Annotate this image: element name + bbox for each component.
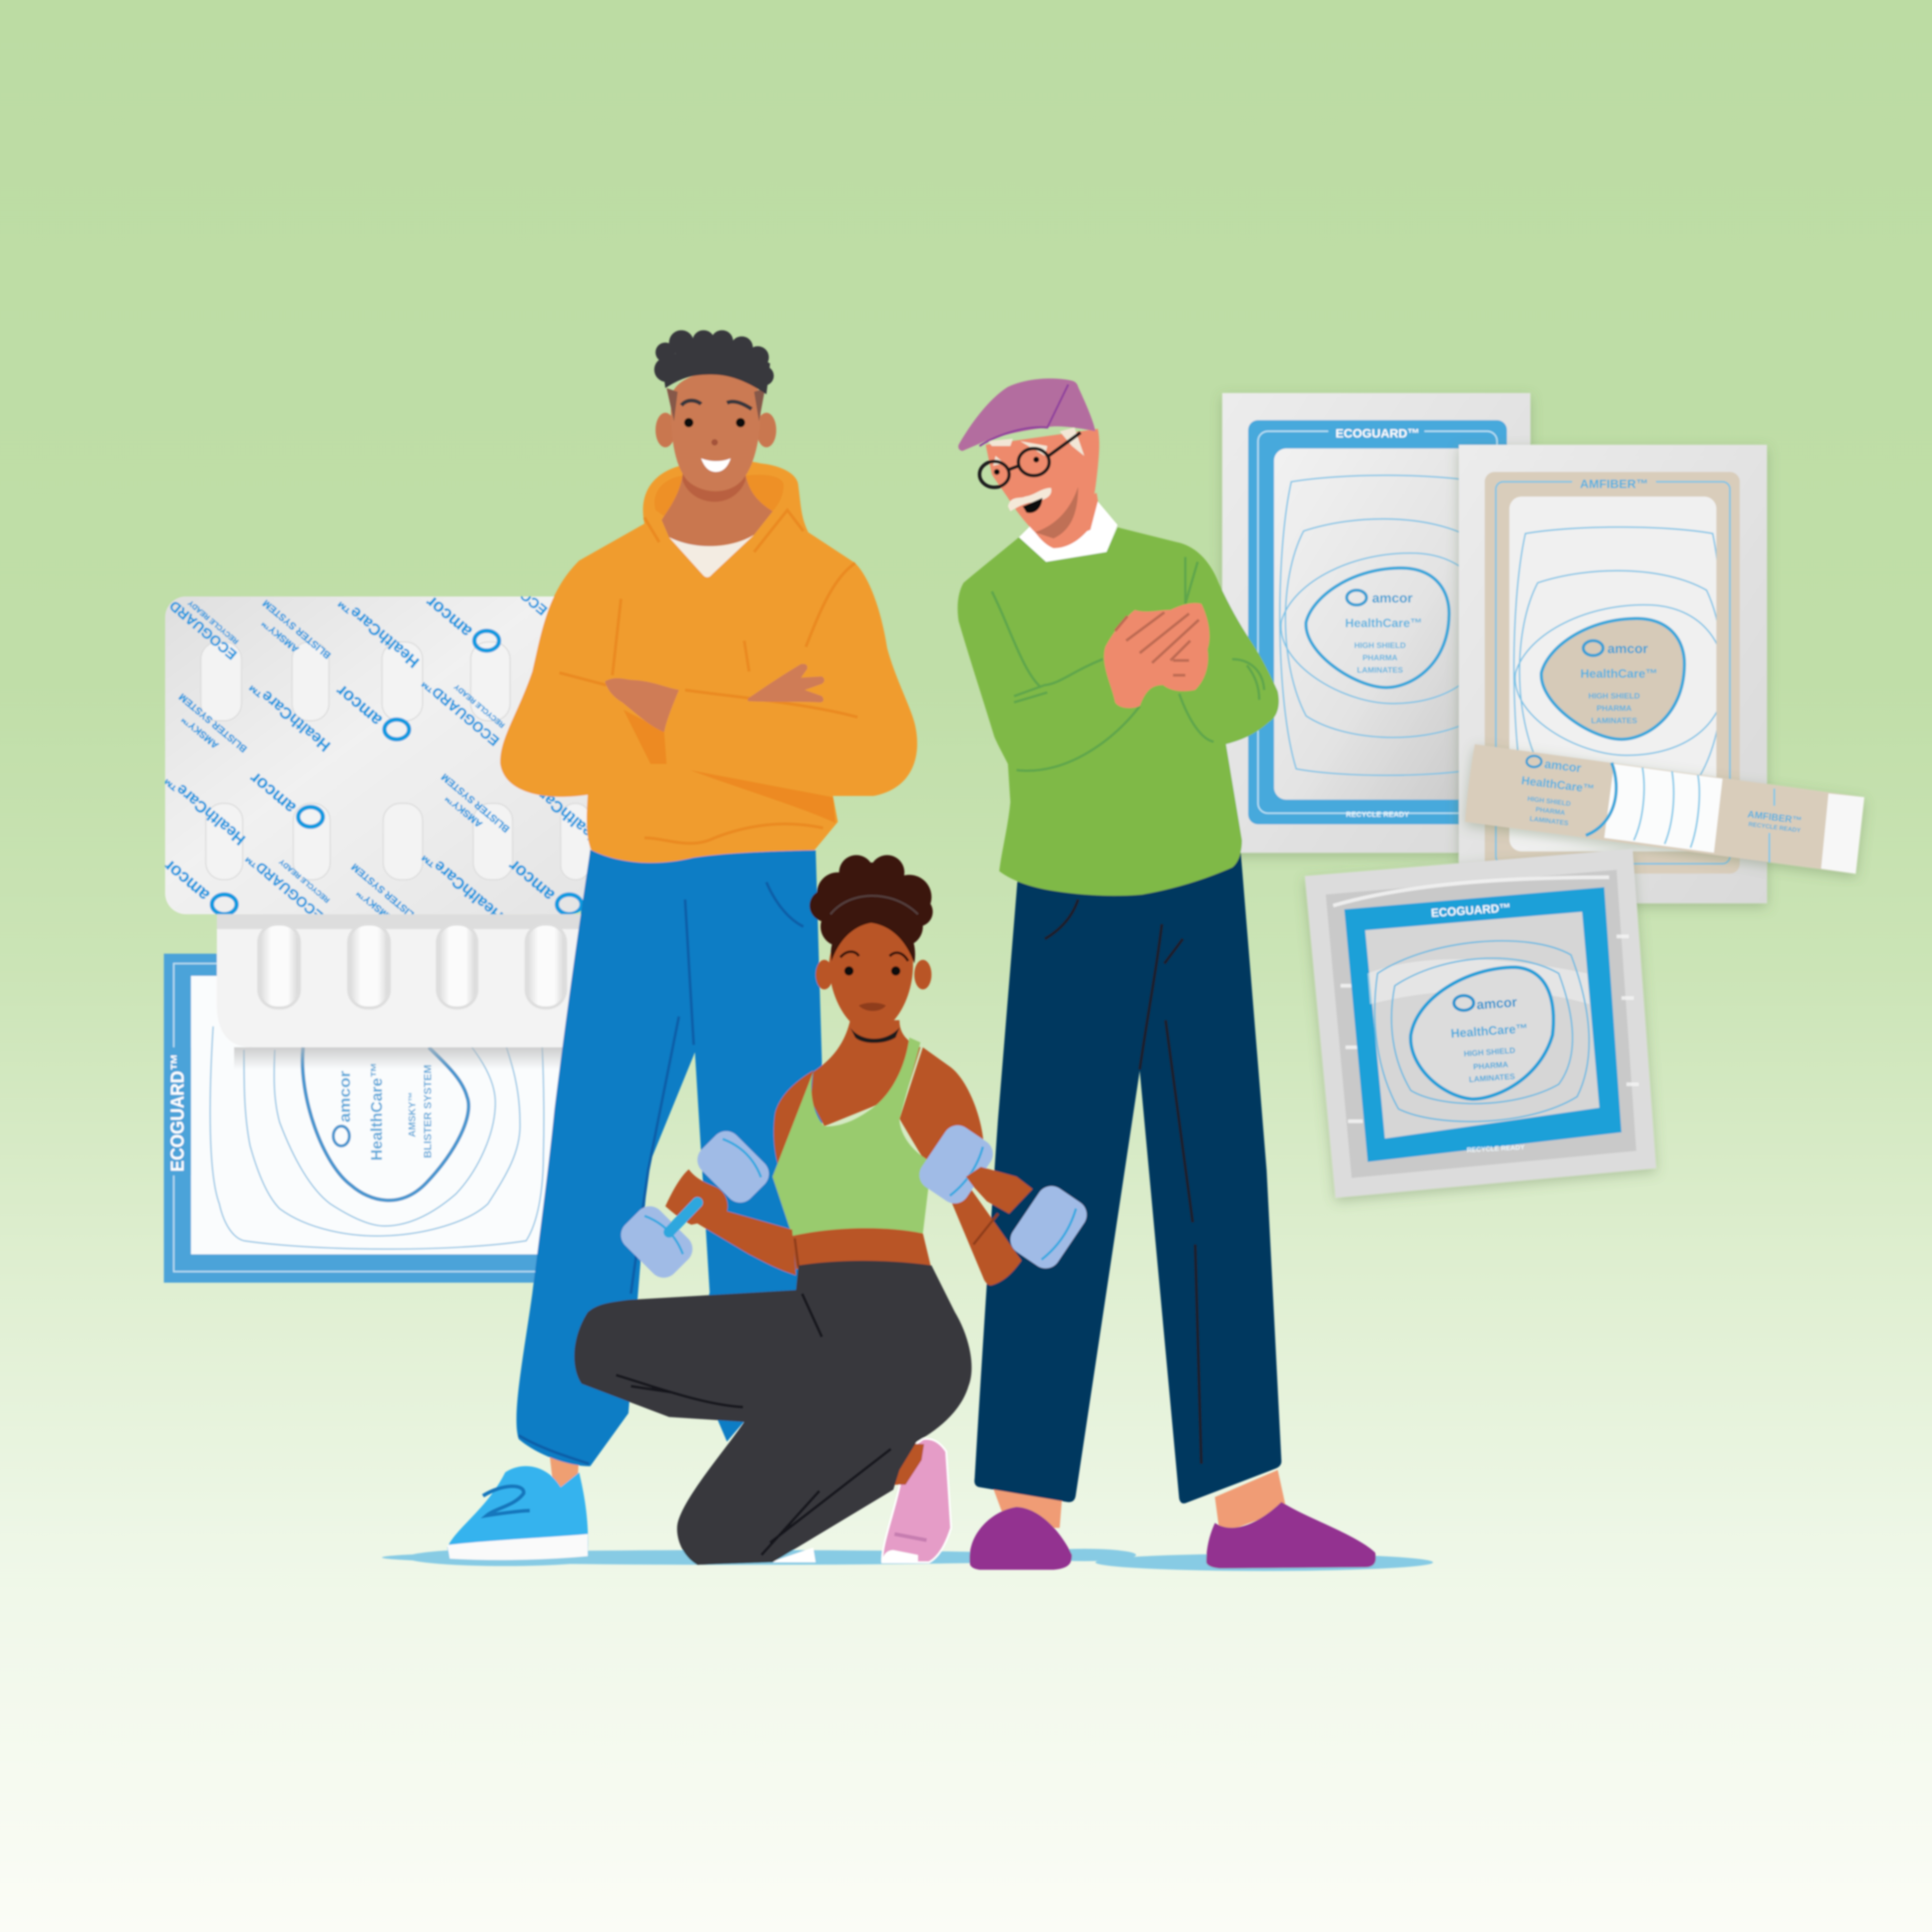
printed foil text pattern: HealthCare™: [516, 770, 605, 849]
sachet label text: PHARMA: [1473, 1061, 1509, 1072]
embossed foil pockets: [201, 642, 590, 880]
pouch label text: HealthCare™: [1345, 617, 1422, 630]
panel: clear Ecoguard sachet: [1305, 849, 1656, 1197]
pouch label text: PHARMA: [1596, 704, 1632, 713]
woman pink shoe: [882, 1439, 951, 1562]
sachet blue frame: [1344, 887, 1622, 1162]
printed foil text pattern: HealthCare™: [418, 847, 506, 925]
man orange hoodie: [500, 460, 917, 863]
printed foil text pattern: [164, 595, 589, 916]
pouch logo blob: [1542, 618, 1684, 739]
printed foil text pattern: BLISTER SYSTEM: [439, 771, 512, 835]
printed foil text pattern: HealthCare™: [160, 770, 249, 849]
tube text: HIGH SHIELD: [1527, 795, 1571, 808]
printed foil text pattern: amcor: [159, 856, 213, 906]
man head: [654, 330, 776, 491]
woman white toe: [770, 1548, 816, 1562]
printed foil text pattern: AMSKY™: [259, 617, 301, 655]
card logo text: HealthCare™: [367, 1062, 385, 1161]
man hair: [654, 330, 774, 394]
woman left arm: [691, 1211, 796, 1275]
sachet label text: [1430, 901, 1528, 1154]
printed foil text pattern: amcor: [422, 592, 476, 642]
pouch label text: amcor: [1372, 591, 1413, 606]
pouch label text: HIGH SHIELD: [1354, 641, 1406, 650]
man crossed hands: [605, 664, 824, 732]
tablet pockets: [259, 924, 566, 1008]
printed foil text pattern: RECYCLE READY: [453, 682, 507, 729]
man neck: [662, 474, 773, 546]
woman back arm and shoulders: [774, 1048, 983, 1177]
woman left fingers: [697, 1188, 723, 1218]
printed foil text pattern: ECOGUARD™: [155, 589, 240, 663]
pouch label text: HIGH SHIELD: [1588, 692, 1640, 701]
woman left dumbbell bells: [615, 1125, 775, 1284]
hoodie fold lines: [559, 510, 857, 843]
printed foil text pattern: AMSKY™: [179, 713, 221, 751]
woman right dumbbell: [914, 1119, 1092, 1274]
printed foil text pattern: ECOGUARD™: [242, 850, 326, 924]
older man clasped hands: [1104, 603, 1210, 708]
sachet label text: amcor: [1476, 994, 1518, 1012]
card contour lines and logo blob: [210, 1026, 544, 1249]
sachet window: [1365, 912, 1599, 1139]
ground shadow: [382, 1549, 1433, 1571]
panel: blue Ecoguard blister card: [164, 954, 589, 1282]
sachet logo blob: [1411, 967, 1554, 1099]
panel: Amfiber pouch: [1459, 445, 1767, 903]
sachet label text: ECOGUARD™: [1430, 901, 1511, 920]
pouch label text: RECYCLE READY: [1346, 811, 1409, 819]
sachet label text: HIGH SHIELD: [1464, 1046, 1515, 1059]
older man purple shoes: [970, 1502, 1376, 1570]
card logo text: AMSKY™: [407, 1092, 418, 1137]
foil logo marks: [212, 631, 582, 914]
tube text: LAMINATES: [1530, 815, 1569, 827]
tube white band: [1604, 764, 1723, 853]
older man purple cap: [958, 378, 1095, 451]
pouch label text: ECOGUARD™: [1335, 427, 1420, 440]
card logo text: [333, 1062, 434, 1161]
older man ankles: [992, 1470, 1286, 1534]
panel: tube stick pack: [1465, 744, 1864, 873]
character: woman with dumbbells: [574, 855, 1092, 1565]
printed foil text pattern: RECYCLE READY: [187, 598, 240, 646]
card logo text: BLISTER SYSTEM: [422, 1065, 434, 1158]
sachet film highlights: [1333, 877, 1639, 1121]
character: young man in orange hoodie: [447, 330, 917, 1560]
printed foil text pattern: HealthCare™: [245, 677, 334, 755]
printed foil text pattern: amcor: [332, 681, 386, 731]
woman black leggings: [574, 1261, 972, 1565]
printed foil text pattern: BLISTER SYSTEM: [349, 861, 422, 925]
older man glasses: [980, 433, 1081, 488]
card logo text: amcor: [336, 1071, 354, 1122]
shadow under tablet strip: [234, 1048, 592, 1070]
sachet label text: RECYCLE READY: [1467, 1143, 1525, 1154]
pouch contours: [1514, 527, 1725, 827]
printed foil text pattern: amcor: [504, 856, 558, 906]
tube text: RECYCLE READY: [1748, 821, 1801, 834]
man blue trousers: [517, 850, 823, 1466]
pouch contours: [1280, 475, 1491, 775]
man ankle: [549, 1454, 579, 1497]
tube text: AMFIBER™: [1747, 809, 1803, 827]
tube text: PHARMA: [1535, 806, 1566, 817]
printed foil text pattern: AMSKY™: [443, 792, 485, 830]
printed foil text pattern: amcor: [246, 768, 299, 818]
pouch window: [1274, 448, 1496, 799]
card brand label: ECOGUARD™: [167, 1054, 188, 1172]
pouch label text: [1572, 474, 1658, 726]
woman neck: [811, 1020, 920, 1126]
older man white hair: [988, 428, 1084, 466]
woman hair: [810, 855, 933, 946]
older man moustache and mouth: [1008, 488, 1052, 511]
panel: Ecoguard pouch: [1222, 393, 1531, 853]
scene: all drawn objects: [155, 330, 1864, 1571]
woman midriff: [792, 1228, 931, 1269]
pouch label text: HealthCare™: [1580, 667, 1658, 681]
pouch logo blob: [1306, 568, 1449, 688]
woman right arm: [951, 1189, 1021, 1285]
tube white end: [1821, 793, 1864, 873]
printed foil text pattern: ECOGUARD™: [466, 544, 550, 618]
pouch window: [1509, 497, 1716, 851]
character: older man in green sweater: [957, 378, 1376, 1570]
pouch label text: LAMINATES: [1357, 666, 1403, 675]
printed foil text pattern: BLISTER SYSTEM: [261, 597, 333, 661]
woman left hand: [665, 1169, 728, 1225]
printed foil text pattern: RECYCLE READY: [278, 857, 332, 904]
man white tee: [669, 535, 754, 577]
printed foil text pattern: AMSKY™: [354, 887, 396, 925]
pouch label text: LAMINATES: [1591, 717, 1637, 726]
pouch label text: [1328, 424, 1424, 819]
man blue shoe: [447, 1466, 588, 1560]
tube text: amcor: [1544, 757, 1582, 775]
hood inner: [655, 475, 784, 530]
tube text: HealthCare™: [1520, 774, 1595, 795]
woman green crop top: [773, 1037, 931, 1236]
tube text: [1520, 756, 1803, 834]
sachet label text: HealthCare™: [1451, 1022, 1528, 1040]
printed foil text pattern: HealthCare™: [334, 593, 423, 672]
older man navy trousers: [975, 853, 1281, 1503]
woman right hand: [966, 1167, 1032, 1214]
older man neck: [1029, 493, 1103, 554]
printed foil text pattern: BLISTER SYSTEM: [177, 691, 249, 755]
tube lines: [1586, 763, 1775, 862]
woman head: [816, 896, 931, 1032]
man face features: [681, 400, 752, 409]
sachet contours: [1375, 941, 1589, 1121]
panel: foil blister back with printed pattern: [164, 595, 592, 916]
sachet label text: LAMINATES: [1469, 1073, 1515, 1084]
older man white collar: [1019, 502, 1117, 562]
woman dumbbell handle: [669, 1202, 697, 1232]
pouch label text: AMFIBER™: [1580, 477, 1648, 491]
panel: white blister tablets strip: [217, 914, 592, 1048]
pouch label text: PHARMA: [1362, 654, 1398, 663]
older man green sweater: [957, 527, 1279, 896]
printed foil text pattern: ECOGUARD™: [418, 675, 502, 749]
pouch label text: amcor: [1607, 641, 1648, 656]
older man head: [958, 378, 1099, 548]
